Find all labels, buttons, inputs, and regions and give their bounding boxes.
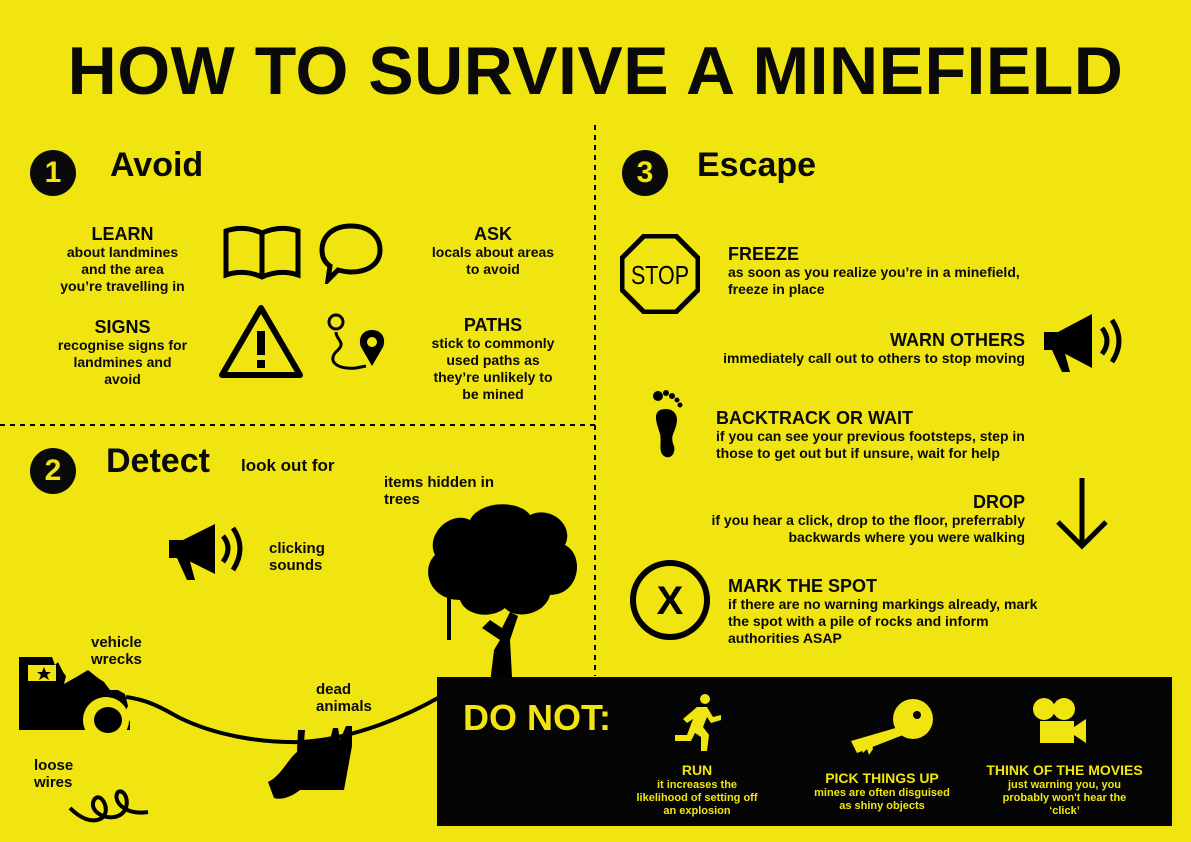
pick things up text [814,770,950,812]
learn text: and the area [81,261,164,277]
icon: speech bubble [320,224,382,284]
drop text [711,492,1025,545]
ask text: ASK [474,224,512,244]
trees text [384,474,494,508]
learn text: LEARN [92,224,154,244]
run text: likelihood of setting off [636,792,758,804]
warn others text: WARN OTHERS [890,330,1025,350]
run text: RUN [682,762,712,778]
trees text: trees [384,491,420,508]
do not heading: DO NOT: [463,697,611,738]
learn text: you’re travelling in [60,278,185,294]
drop text: if you hear a click, drop to the floor, preferrably [711,512,1025,528]
signs text: landmines and [73,354,172,370]
number 2: 2 [45,454,61,487]
pick things up text: as shiny objects [839,800,925,812]
title: HOW TO SURVIVE A MINEFIELD [68,33,1123,109]
warn others text [723,330,1025,366]
think of the movies text: probably won't hear the [1003,792,1126,804]
clicking sounds text: sounds [269,557,322,574]
number 2 [30,448,76,494]
icon: megaphone [169,524,242,580]
clicking sounds text: clicking [269,540,325,557]
number 3: 3 [637,156,653,189]
look out for: look out for [241,456,334,475]
number 1 [30,150,76,196]
backtrack text [716,408,1025,461]
freeze text: FREEZE [728,244,799,264]
run text [636,762,758,817]
dead animals text [316,681,372,715]
backtrack text: BACKTRACK OR WAIT [716,408,913,428]
vehicle wrecks text: wrecks [91,651,142,668]
think of the movies text: just warning you, you [1008,779,1121,791]
number 1: 1 [45,156,61,189]
trees text: items hidden in [384,474,494,491]
run text: an explosion [663,805,731,817]
mark the spot text: if there are no warning markings already, mark [728,596,1037,612]
backtrack text: if you can see your previous footsteps, step in [716,428,1025,444]
icon: megaphone [1044,314,1122,372]
signs text: avoid [104,371,141,387]
paths text: stick to commonly [432,335,554,351]
clicking sounds text [269,540,325,574]
loose wires text: loose [34,757,73,774]
icon: stop sign [620,234,700,314]
icon: tree [428,504,577,677]
paths text [432,315,554,402]
signs text: recognise signs for [58,337,187,353]
icon: key [851,699,933,755]
pick things up text: mines are often disguised [814,787,950,799]
signs text: SIGNS [94,317,150,337]
icon: book [224,226,300,280]
freeze text: as soon as you realize you’re in a minefield, [728,264,1020,280]
heading escape: Escape [697,146,816,184]
backtrack text: those to get out but if unsure, wait for help [716,445,1000,461]
icon: x circle: X [657,579,684,623]
think of the movies text [986,762,1143,817]
heading detect: Detect [106,442,210,480]
paths text: PATHS [464,315,522,335]
icon: warning triangle [219,305,303,378]
signs text [58,317,187,387]
icon: movie camera [1033,698,1086,743]
dead animals text: animals [316,698,372,715]
icon: car wreck, wire, dead animal, coil [19,657,437,822]
learn text [60,224,185,294]
mark the spot text: the spot with a pile of rocks and inform [728,613,989,629]
paths text: they’re unlikely to [433,369,553,385]
panel: avoid [30,146,554,402]
drop text: backwards where you were walking [788,529,1025,545]
mark the spot text [728,576,1038,646]
icon: map path [328,314,384,370]
think of the movies text: THINK OF THE MOVIES [986,762,1143,778]
loose wires text: wires [34,774,72,791]
think of the movies text: ‘click’ [1049,805,1080,817]
paths text: be mined [462,386,524,402]
dead animals text: dead [316,681,351,698]
heading avoid: Avoid [110,146,203,184]
freeze text [728,244,1020,297]
freeze text: freeze in place [728,281,824,297]
icon: x circle [630,560,710,640]
warn others text: immediately call out to others to stop moving [723,350,1025,366]
loose wires text [34,757,73,791]
drop text: DROP [973,492,1025,512]
icon: runner [675,694,721,751]
learn text: about landmines [67,244,178,260]
icon: stop sign: STOP [631,260,689,290]
paths text: used paths as [446,352,540,368]
ask text: locals about areas [432,244,554,260]
mark the spot text: authorities ASAP [728,630,842,646]
mark the spot text: MARK THE SPOT [728,576,877,596]
vehicle wrecks text: vehicle [91,634,142,651]
vehicle wrecks text [91,634,142,668]
ask text [432,224,554,277]
pick things up text: PICK THINGS UP [825,770,939,786]
run text: it increases the [657,779,737,791]
panel: detect [30,442,577,791]
number 3 [622,150,668,196]
icon: footprint [653,390,682,458]
panel: do not [437,677,1172,826]
icon: down arrow [1056,478,1108,550]
panel: escape [620,146,1122,646]
ask text: to avoid [466,261,520,277]
